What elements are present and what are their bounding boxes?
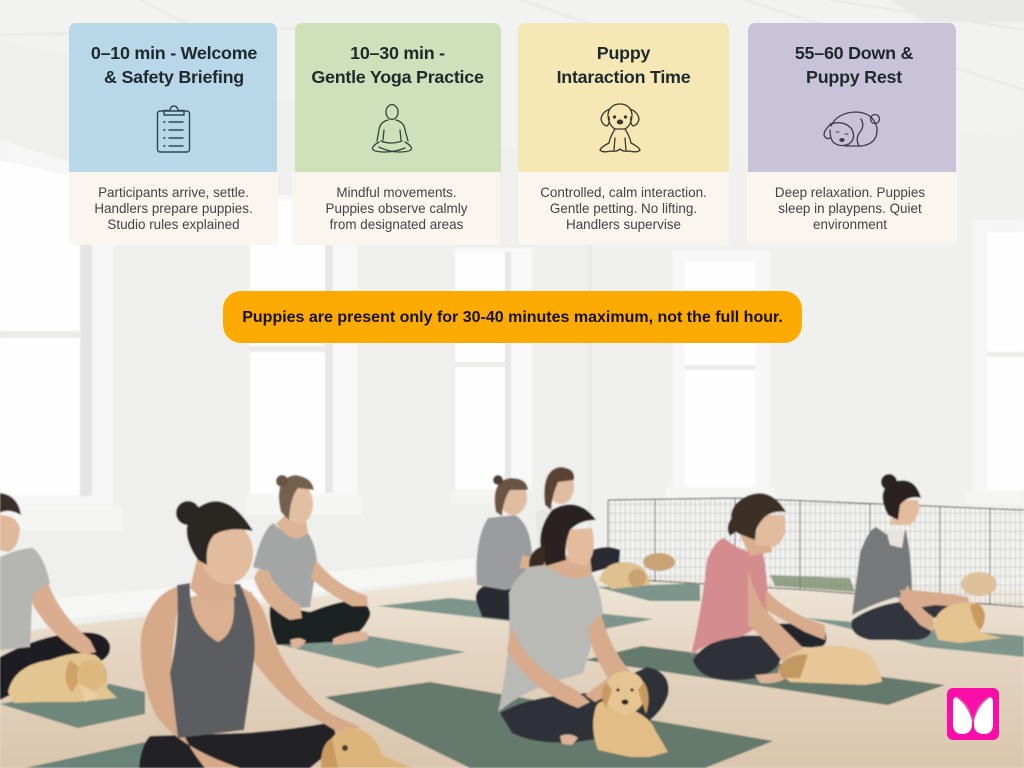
heading: Puppy [597,43,650,63]
window 3 [450,248,532,504]
icon: clipboard [156,105,190,153]
callout: puppy time note: Puppies are present only for 30-40 minutes maximum, not the full hour. [242,309,783,326]
description: Controlled, calm interaction. [540,185,707,200]
puppy sleeping in playpen, right [961,572,997,596]
puppy: back mat [599,562,650,589]
heading: Intaraction Time [557,67,690,87]
description: Studio rules explained [107,217,240,232]
person: right woman H [851,474,970,640]
window 4 [666,250,774,498]
card header: yellow [518,23,729,172]
panel: 55–60 rest [747,23,957,245]
puppy: far-left [8,653,117,703]
card header: green [295,23,501,172]
icon: brand logo [947,688,999,740]
window 5 [966,220,1024,504]
person: back row, woman E [535,467,620,573]
heading: 10–30 min - [350,43,445,63]
heading [557,43,690,87]
icon: meditating person [372,104,412,153]
heading: 55–60 Down & [795,43,913,63]
wire playpens [608,498,1024,607]
card body [747,172,957,245]
description: Deep relaxation. Puppies [775,185,925,200]
puppy: front centre [593,671,668,757]
panel: puppy interaction [518,23,729,245]
card header: blue [69,23,277,172]
card header: purple [748,23,956,172]
heading: 0–10 min - Welcome [91,43,257,63]
heading [795,43,913,87]
card body [292,172,500,245]
window 2 [246,195,362,515]
puppy: front-left [321,727,412,768]
person: far-left woman A [0,493,110,700]
ceiling [0,0,1024,200]
description [94,185,253,232]
person: front centre woman F [498,504,669,745]
description: sleep in playpens. Quiet [778,201,922,216]
panel: 0–10 min welcome [69,23,278,245]
description [326,185,468,232]
callout: puppy time note [223,291,802,343]
panel: 10–30 min yoga [292,23,501,245]
puppy: right woman [933,602,1002,643]
heading: Puppy Rest [806,67,902,87]
description: Puppies observe calmly [326,201,467,216]
window 1 [0,140,122,530]
description: from designated areas [330,217,463,232]
description [540,185,707,232]
icon: sitting puppy [599,103,641,152]
person: big front woman B [139,501,360,768]
heading: Gentle Yoga Practice [311,67,484,87]
walls [0,40,1024,640]
description: Participants arrive, settle. [98,185,249,200]
puppy: pink shirt woman [778,646,882,685]
description: Handlers prepare puppies. [94,201,253,216]
description: environment [813,217,887,232]
floor [0,574,1024,768]
description [775,185,925,232]
heading: & Safety Briefing [104,67,244,87]
card body [518,172,729,245]
person: mid-left woman C [253,475,370,648]
person: back row, woman D [476,475,590,620]
yoga mat row: back [280,583,1024,668]
heading [91,43,257,87]
heading [311,43,484,87]
yoga mats: front [0,646,945,768]
icon: sleeping puppy [823,111,880,147]
description: Handlers supervise [566,217,681,232]
card body [69,172,278,245]
description: Gentle petting. No lifting. [550,201,697,216]
description: Mindful movements. [336,185,457,200]
person: pink shirt woman G [691,493,826,683]
puppy sleeping in playpen, left [643,553,675,571]
